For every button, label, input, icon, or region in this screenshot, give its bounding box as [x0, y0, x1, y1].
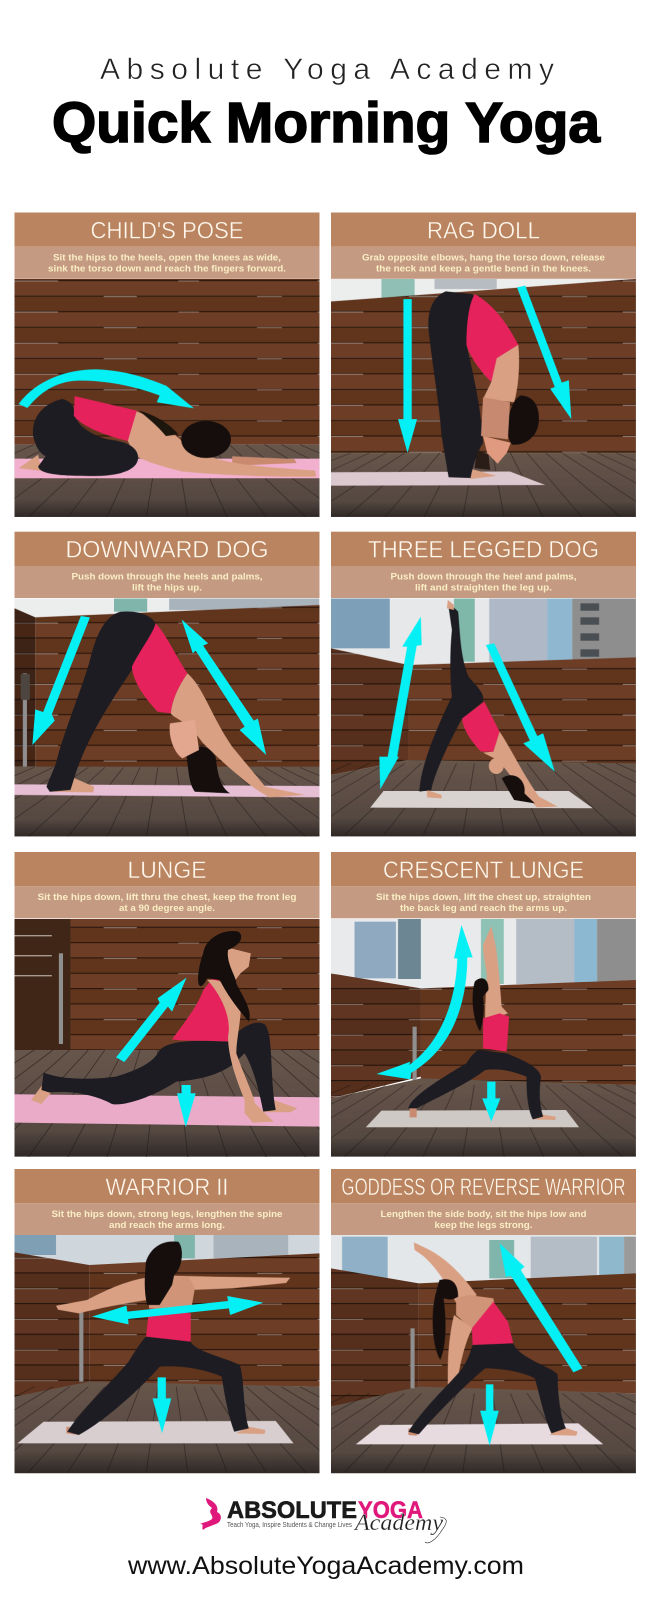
arrows: warrior II [92, 1296, 263, 1433]
heading: crescent lunge: CRESCENT LUNGE [383, 857, 584, 884]
photo: three legged dog [331, 598, 636, 836]
photo: crescent lunge [331, 919, 636, 1157]
instruction: warrior II [14, 1203, 320, 1235]
photo: warrior II [14, 1235, 320, 1474]
instruction: goddess or reverse warrior: keep the legs strong. [434, 1220, 532, 1231]
panel: downward dog [0, 532, 466, 837]
instruction: child's pose: sink the torso down and reach the fingers forward. [48, 264, 286, 274]
instruction: goddess or reverse warrior: Lengthen the side body, sit the hips low and [380, 1209, 587, 1220]
heading: lunge: LUNGE [128, 857, 206, 884]
heading: three legged dog [331, 532, 636, 566]
instruction: rag doll [331, 247, 636, 279]
instruction: crescent lunge: Sit the hips down, lift the chest up, straighten [376, 892, 591, 903]
instruction: three legged dog: lift and straighten the leg up. [415, 583, 552, 594]
logo tagline: Teach Yoga, Inspire Students & Change Lives [227, 1520, 352, 1529]
heading: downward dog: DOWNWARD DOG [66, 537, 268, 564]
instruction: goddess or reverse warrior [331, 1203, 636, 1235]
heading: downward dog [14, 532, 320, 566]
instruction: warrior II: Sit the hips down, strong legs, lengthen the spine [52, 1209, 282, 1220]
arrows: downward dog [32, 616, 266, 755]
heading: rag doll [331, 212, 636, 247]
panel: goddess or reverse warrior [331, 1169, 636, 1474]
heading: child's pose [14, 212, 320, 247]
heading: warrior II: WARRIOR II [106, 1174, 228, 1201]
logo script: academy: Academy [353, 1510, 444, 1535]
website url: www.AbsoluteYogaAcademy.com [127, 1552, 524, 1580]
instruction: lunge: Sit the hips down, lift thru the chest, keep the front leg [38, 892, 297, 903]
photo: goddess or reverse warrior [331, 1235, 636, 1474]
instruction: downward dog [14, 566, 320, 598]
photo: child's pose [14, 279, 320, 517]
photo: downward dog [14, 598, 320, 836]
instruction: warrior II: and reach the arms long. [109, 1220, 225, 1231]
instruction: child's pose: Sit the hips to the heels, open the knees as wide, [53, 252, 281, 264]
title: academy name: Absolute Yoga Academy [100, 53, 554, 86]
instruction: lunge: at a 90 degree angle. [119, 903, 215, 914]
arrows: rag doll [398, 286, 571, 453]
arrows: goddess or reverse warrior [480, 1243, 583, 1446]
logo wordmark: yoga: YOGA [358, 1497, 423, 1524]
panel: crescent lunge [331, 852, 636, 1157]
panel: child's pose [14, 212, 320, 517]
panel: three legged dog [331, 532, 636, 836]
photo: lunge [14, 919, 320, 1157]
arrows: three legged dog [379, 617, 555, 789]
heading: rag doll: RAG DOLL [427, 218, 540, 244]
arrows: crescent lunge [376, 925, 500, 1122]
heading: three legged dog: THREE LEGGED DOG [368, 537, 599, 564]
panel: rag doll [331, 212, 636, 517]
heading: warrior II [14, 1169, 320, 1203]
logo: Absolute Yoga Academy [200, 1497, 446, 1543]
heading: lunge [14, 852, 320, 886]
instruction: rag doll: the neck and keep a gentle bend in the knees. [376, 264, 591, 274]
title: Quick Morning Yoga: Quick Morning Yoga [52, 91, 601, 155]
instruction: rag doll: Grab opposite elbows, hang the torso down, release [362, 252, 605, 264]
instruction: child's pose [14, 247, 320, 279]
logo wordmark: absolute: ABSOLUTE [227, 1497, 357, 1524]
heading: crescent lunge [331, 852, 636, 886]
instruction: crescent lunge: the back leg and reach the arms up. [400, 903, 567, 914]
logo script: academy [353, 1510, 446, 1543]
instruction: crescent lunge [331, 886, 636, 918]
instruction: three legged dog [331, 566, 636, 598]
arrow: curved over back [19, 369, 194, 408]
arrows: lunge [116, 978, 196, 1127]
icon: pink lotus [200, 1498, 221, 1530]
instruction: downward dog: Push down through the heels and palms, [72, 572, 263, 583]
instruction: lunge [14, 886, 320, 918]
panel: warrior II [14, 1169, 320, 1474]
panel: lunge [14, 852, 320, 1157]
instruction: downward dog: lift the hips up. [132, 583, 202, 594]
instruction: three legged dog: Push down through the heel and palms, [390, 572, 577, 583]
photo: rag doll [331, 279, 636, 517]
heading: child's pose: CHILD'S POSE [90, 218, 244, 244]
